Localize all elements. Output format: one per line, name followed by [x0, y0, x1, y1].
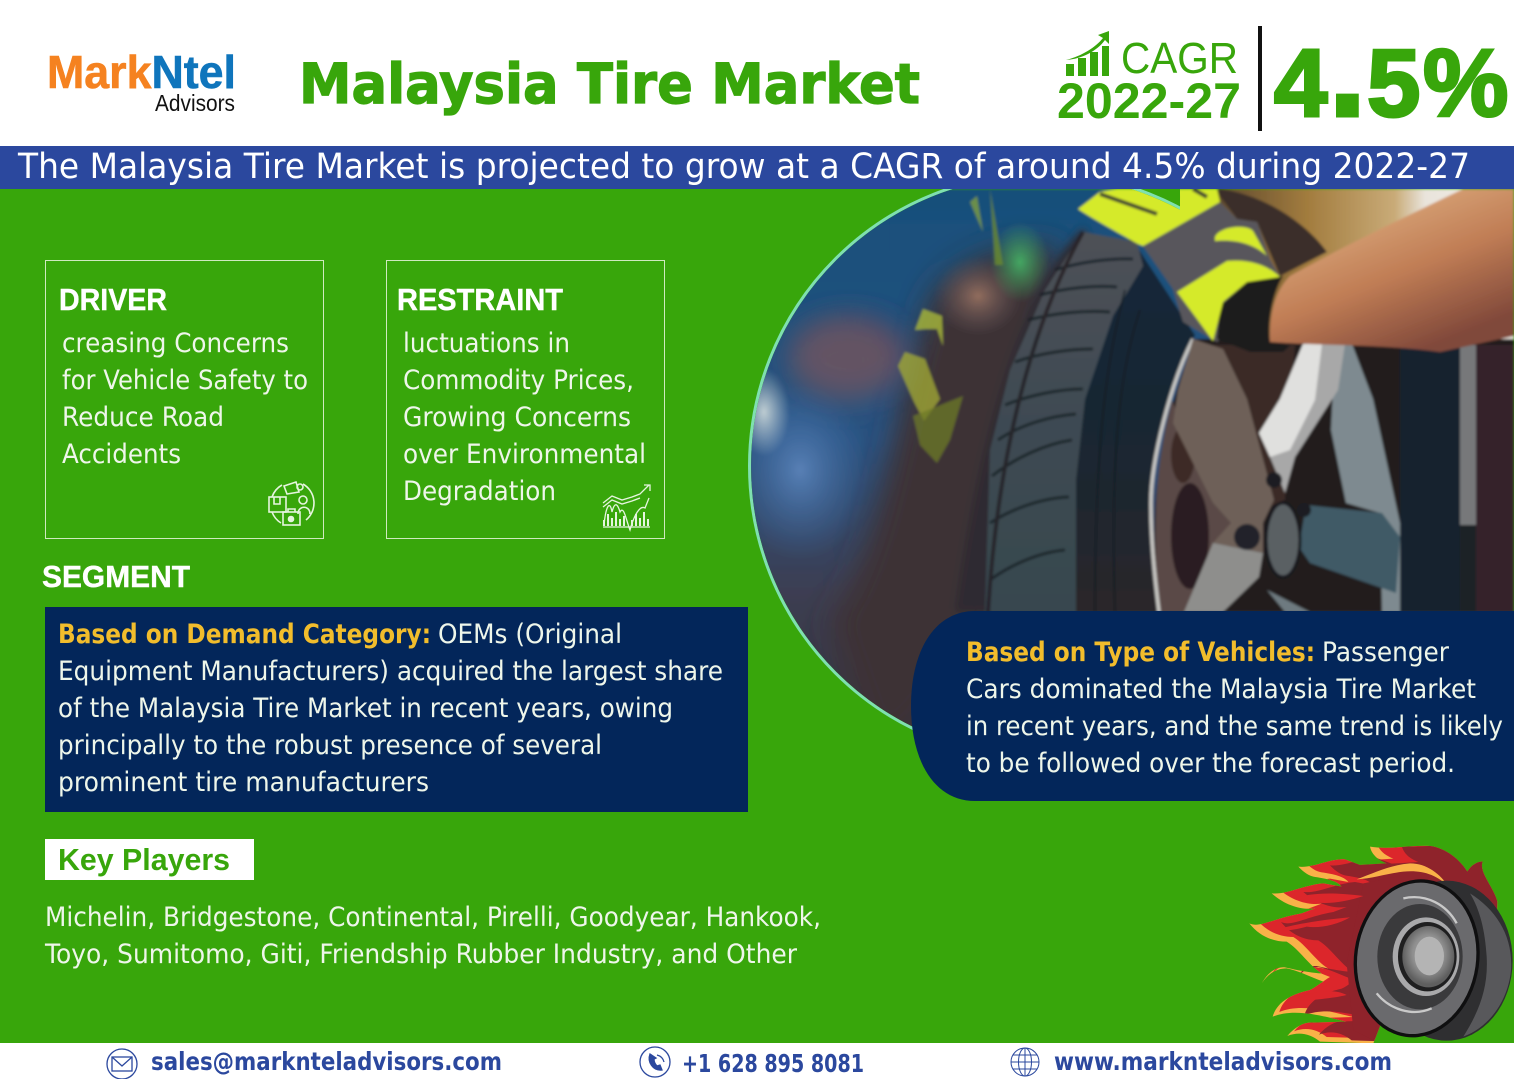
tire rear	[1381, 881, 1513, 1041]
icon: rising bar chart with arrow	[1066, 31, 1109, 76]
fender	[830, 247, 1060, 760]
driver text	[62, 328, 308, 470]
panel: type of vehicles: to be followed over the forecast period.	[966, 748, 1455, 779]
tire front	[1344, 871, 1490, 1046]
contact: phone: +1 628 895 8081	[682, 1049, 864, 1078]
rear tire top	[1217, 189, 1327, 276]
CAGR value: 4	[1274, 30, 1327, 137]
panel: demand category: principally to the robust presence of several	[58, 730, 602, 761]
panel: driver	[46, 260, 324, 538]
heading: segment: SEGMENT	[42, 559, 190, 594]
contact: phone	[640, 1047, 864, 1078]
heading: restraint: RESTRAINT	[397, 282, 563, 317]
rim edge	[1151, 339, 1193, 612]
panel: demand category	[45, 607, 748, 812]
hub and bolts	[1266, 503, 1300, 577]
restraint text: Degradation	[403, 476, 556, 507]
icon: globe	[1011, 1048, 1039, 1076]
glove yellow fingers	[1078, 189, 1220, 246]
glove wrist	[1177, 261, 1280, 341]
panel: demand category: Based on Demand Category:	[58, 619, 431, 650]
icon: consumer circle	[269, 482, 314, 525]
panel: type of vehicles: Passenger	[1322, 637, 1450, 668]
glove cuff	[1217, 276, 1290, 352]
glove patch	[1215, 227, 1267, 256]
contact: website: www.marknteladvisors.com	[1054, 1047, 1392, 1076]
restraint text: over Environmental	[403, 439, 646, 470]
panel: demand category: prominent tire manufacturers	[58, 767, 429, 798]
icon: flaming tire	[1249, 841, 1514, 1046]
tire tread band	[985, 232, 1143, 612]
flames	[1249, 846, 1497, 1043]
spoke: lower	[1184, 543, 1263, 612]
icon: envelope	[107, 1049, 137, 1079]
panel: demand category: Equipment Manufacturers) acquired the largest share	[58, 656, 723, 687]
footer	[0, 1043, 1514, 1079]
driver text: Accidents	[62, 439, 181, 470]
contact: email: sales@marknteladvisors.com	[151, 1047, 502, 1076]
key players label: Key Players	[58, 842, 230, 877]
icon: market chart	[603, 485, 650, 530]
restraint text	[403, 328, 646, 507]
panel: demand category: OEMs (Original	[438, 619, 622, 650]
restraint text: luctuations in	[403, 328, 570, 359]
driver text: creasing Concerns	[62, 328, 289, 359]
CAGR label: CAGR	[1121, 34, 1238, 83]
panel: type of vehicles	[911, 611, 1514, 801]
key players list: Toyo, Sumitomo, Giti, Friendship Rubber Industry, and Other	[44, 939, 798, 970]
key players list	[44, 902, 821, 970]
restraint text: Growing Concerns	[403, 402, 631, 433]
spoke: brown	[1173, 339, 1274, 553]
driver text: Reduce Road	[62, 402, 224, 433]
key players list: Michelin, Bridgestone, Continental, Pirelli, Goodyear, Hankook,	[45, 902, 821, 933]
right car body	[1400, 345, 1460, 612]
title: Malaysia Tire Market	[299, 52, 920, 116]
CAGR value: 5	[1367, 30, 1420, 137]
logo: MarkNtel Advisors: Advisors	[155, 90, 235, 116]
logo: MarkNtel Advisors: MarkNtel	[47, 46, 236, 98]
green background panel	[0, 189, 1514, 1043]
hub rings	[1393, 917, 1459, 996]
panel: type of vehicles: Based on Type of Vehicles:	[966, 637, 1315, 668]
tire dark shoulder	[955, 228, 1090, 612]
icon: phone	[640, 1047, 670, 1077]
spoke: right	[1331, 344, 1400, 612]
driver text: for Vehicle Safety to	[62, 365, 308, 396]
heading: driver: DRIVER	[59, 282, 167, 317]
glove gray	[1143, 202, 1280, 342]
CAGR value: %	[1423, 30, 1508, 137]
spoke: white	[1259, 344, 1345, 493]
wheel interior	[1154, 339, 1514, 612]
brake disc	[1155, 400, 1231, 612]
restraint text: Commodity Prices,	[403, 365, 634, 396]
photo: mechanic hand on tire	[730, 174, 1514, 760]
CAGR block	[1057, 0, 1508, 146]
panel: restraint	[386, 260, 664, 538]
panel: type of vehicles: Cars dominated the Malaysia Tire Market	[966, 674, 1476, 705]
panel: demand category: of the Malaysia Tire Market in recent years, owing	[58, 693, 673, 724]
tire sidewall	[1070, 236, 1195, 612]
spoke: teal	[1299, 505, 1400, 593]
CAGR period: 2022-27	[1057, 73, 1241, 129]
divider	[1258, 26, 1262, 131]
arm	[1270, 189, 1514, 352]
top right background	[1217, 189, 1514, 339]
fender reflection	[915, 309, 943, 346]
